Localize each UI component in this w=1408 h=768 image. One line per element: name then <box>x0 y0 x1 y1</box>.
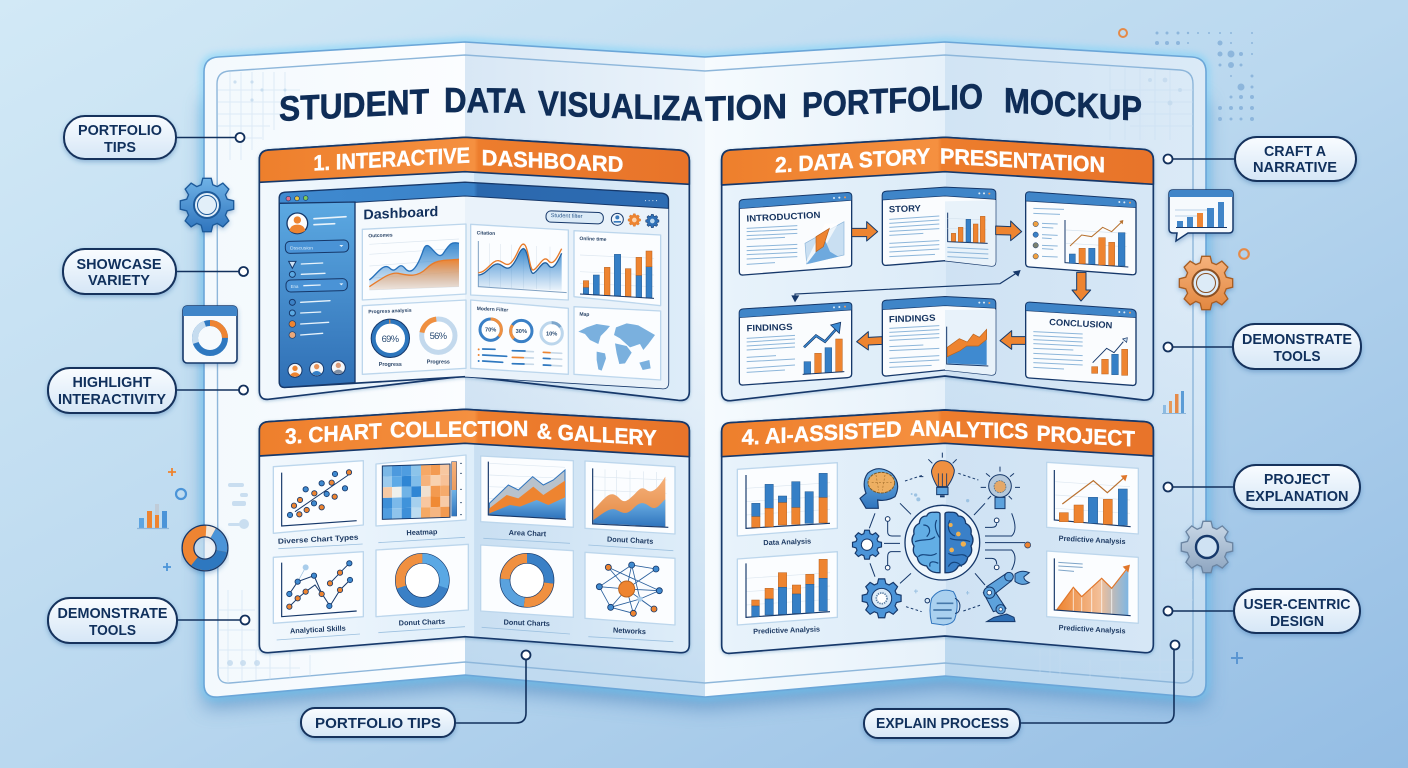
icon: gear <box>853 530 881 559</box>
panel 3 header <box>259 409 689 457</box>
callout: demonstrate tools left <box>48 598 250 643</box>
folded portfolio page <box>204 42 1206 708</box>
line chart card <box>362 224 466 300</box>
caption: Area Chart <box>509 528 547 538</box>
multi area chart card <box>585 461 675 534</box>
small sparkle dots <box>911 493 969 595</box>
panel 4: ai-assisted analytics project <box>722 410 1153 653</box>
callout: demonstrate tools right: TOOLS <box>1274 348 1320 365</box>
panel 2: data story presentation <box>722 137 1153 401</box>
icon: blue plus <box>163 563 171 571</box>
title: STUDENT <box>279 82 430 129</box>
caption: Predictive Analysis <box>1058 534 1126 546</box>
thin connector arrow <box>791 270 1021 302</box>
dashboard heading: Dashboard <box>363 203 438 222</box>
callout: portfolio tips bottom <box>301 650 530 737</box>
wave chart card: Citation <box>477 230 495 237</box>
scatter chart card <box>273 461 363 533</box>
callout: portfolio tips: TIPS <box>104 139 136 156</box>
title <box>279 77 1142 129</box>
icon: robot head <box>925 590 960 625</box>
icon: blue ring <box>176 489 186 499</box>
predictive area card <box>1047 551 1138 623</box>
caption <box>483 528 570 543</box>
wave chart card <box>471 224 568 300</box>
callout: project explanation <box>1164 465 1360 509</box>
slide: findings left: FINDINGS <box>746 322 793 333</box>
slide: story <box>882 187 996 266</box>
caption <box>277 624 360 640</box>
callout: highlight interactivity: INTERACTIVITY <box>58 391 166 408</box>
icon: mini bars <box>1162 391 1186 414</box>
central AI brain <box>905 505 980 580</box>
icon: orange light bulb <box>919 453 957 497</box>
icon: donut <box>188 531 222 565</box>
dashboard window <box>279 182 668 388</box>
panel 3 header: & GALLERY <box>537 418 657 451</box>
heatmap card <box>376 455 466 526</box>
modern filter card: 10% <box>546 331 557 337</box>
decorative dot field <box>1155 32 1254 121</box>
callout: user-centric design <box>1164 589 1360 633</box>
icon: grey gear <box>1181 521 1233 573</box>
title: VISUALIZA <box>538 84 703 129</box>
slide: introduction <box>739 193 852 275</box>
caption: Heatmap <box>406 527 438 537</box>
icon: blue plus right <box>1231 652 1243 664</box>
callout: portfolio tips bottom: PORTFOLIO TIPS <box>315 715 441 732</box>
modern filter card <box>471 300 568 374</box>
panel 1 header: 1. INTERACTIVE <box>313 143 470 176</box>
callout: explain process: EXPLAIN PROCESS <box>876 715 1009 732</box>
panel 4 header <box>722 410 1153 457</box>
caption: Donut Charts <box>503 618 550 628</box>
callout: demonstrate tools left: DEMONSTRATE <box>58 605 168 622</box>
caption: Analytical Skills <box>290 624 346 635</box>
progress donuts card <box>362 300 466 374</box>
progress donuts card: 56% <box>430 331 447 341</box>
world map card <box>574 307 661 380</box>
panel 4 header: ANALYTICS <box>910 415 1028 444</box>
connectors around brain <box>869 473 1025 612</box>
icon: grey light bulb <box>981 467 1020 509</box>
caption: Donut Charts <box>399 617 445 627</box>
icon: orange ring top <box>1119 29 1127 37</box>
arrow <box>1072 272 1091 301</box>
icon: orange ring <box>1239 249 1249 259</box>
callout: showcase variety: SHOWCASE <box>76 256 162 273</box>
icon: donut window <box>183 306 237 363</box>
icon: robot arm <box>983 571 1029 622</box>
panel 2 header: PRESENTATION <box>940 143 1105 177</box>
slide: findings left <box>739 303 852 385</box>
progress donuts card: 69% <box>382 334 399 344</box>
panel 4 header: 4. AI-ASSISTED <box>742 416 902 450</box>
caption <box>588 534 673 551</box>
slide: conclusion <box>1026 302 1136 385</box>
world map card: Map <box>579 312 589 318</box>
icon: small bar chart <box>137 504 169 528</box>
dashboard sidebar: Dsscusion <box>290 245 313 251</box>
panel 1 header: DASHBOARD <box>482 145 623 177</box>
slide: conclusion: CONCLUSION <box>1049 317 1113 330</box>
panel 1: interactive dashboard <box>259 137 689 400</box>
callout: user-centric design: USER-CENTRIC <box>1244 596 1351 613</box>
callout: project explanation: EXPLANATION <box>1246 488 1348 505</box>
progress donuts card: Progress <box>379 362 402 368</box>
modern filter card: 70% <box>485 328 496 334</box>
callout: demonstrate tools right <box>1164 324 1361 369</box>
callout: showcase variety: VARIETY <box>88 272 150 289</box>
progress donuts card: Progress <box>427 359 450 365</box>
progress donuts card: Progress analysis <box>368 308 412 315</box>
panel 4 header: PROJECT <box>1037 421 1136 452</box>
modern filter card: 30% <box>516 329 527 335</box>
icon: orange plus <box>168 468 176 476</box>
filter and toolbar <box>546 211 659 228</box>
predictive line and bar card <box>1047 462 1138 534</box>
filter and toolbar: Student filter <box>551 213 583 220</box>
icon: blue gear <box>180 178 234 232</box>
arrow <box>852 222 878 241</box>
line chart card: Outcomes <box>368 232 393 239</box>
caption: Data Analysis <box>763 537 811 547</box>
slide: chart <box>1026 192 1136 275</box>
callout: highlight interactivity <box>48 368 248 413</box>
donut card <box>376 544 468 617</box>
callout: project explanation: PROJECT <box>1264 471 1330 488</box>
callout: craft a narrative: CRAFT A <box>1264 143 1326 160</box>
data analysis card <box>737 463 837 536</box>
panel 2 header <box>722 137 1153 185</box>
callout: demonstrate tools left: TOOLS <box>89 622 136 639</box>
caption: Predictive Analysis <box>1058 623 1126 635</box>
panel 2 header: 2. DATA STORY <box>775 143 930 178</box>
title: MOCKUP <box>1004 81 1142 129</box>
caption <box>588 625 673 642</box>
arrow <box>996 221 1022 241</box>
slide: story: STORY <box>889 203 921 214</box>
icon: chart speech bubble <box>1169 190 1233 241</box>
area chart card <box>481 456 573 527</box>
line chart card <box>273 552 363 623</box>
callout: explain process <box>864 640 1180 738</box>
predictive analysis card <box>737 552 837 625</box>
callout: showcase variety <box>63 249 248 294</box>
arrow <box>857 332 882 350</box>
caption: Donut Charts <box>607 534 654 546</box>
callout: portfolio tips: PORTFOLIO <box>78 122 162 139</box>
icon: large gear <box>862 579 901 618</box>
callout: craft a narrative <box>1164 137 1356 181</box>
dashboard sidebar: Ena <box>291 284 299 289</box>
title: TION <box>705 87 787 129</box>
callout: portfolio tips <box>64 116 244 159</box>
caption: Predictive Analysis <box>753 625 820 636</box>
callout: highlight interactivity: HIGHLIGHT <box>72 374 152 391</box>
panel 1 header <box>259 137 689 184</box>
panel 3: chart collection and gallery <box>259 409 689 653</box>
network card <box>585 552 675 625</box>
caption: Networks <box>613 625 646 636</box>
slide: introduction: INTRODUCTION <box>746 210 821 224</box>
title: PORTFOLIO <box>802 77 983 125</box>
bar chart card: Online time <box>579 236 607 243</box>
modern filter card: Modern Filter <box>477 306 508 314</box>
panel 3 header: 3. CHART <box>285 418 382 449</box>
caption: Diverse Chart Types <box>278 533 359 546</box>
icon: head with brain <box>860 469 898 508</box>
caption <box>378 617 465 633</box>
callout: craft a narrative: NARRATIVE <box>1253 159 1337 176</box>
arrow <box>1000 331 1026 349</box>
slide: findings middle: FINDINGS <box>889 313 936 324</box>
callout: demonstrate tools right: DEMONSTRATE <box>1242 331 1352 348</box>
caption <box>278 533 363 549</box>
caption <box>482 618 570 634</box>
title: DATA <box>444 81 526 121</box>
slide: findings middle <box>882 297 996 376</box>
icon: orange gear <box>1179 256 1233 310</box>
bar chart card <box>574 231 661 306</box>
dashboard sidebar <box>285 213 349 377</box>
donut card <box>481 545 573 617</box>
caption <box>378 527 465 543</box>
callout: user-centric design: DESIGN <box>1270 613 1324 630</box>
panel 3 header: COLLECTION <box>390 416 528 442</box>
